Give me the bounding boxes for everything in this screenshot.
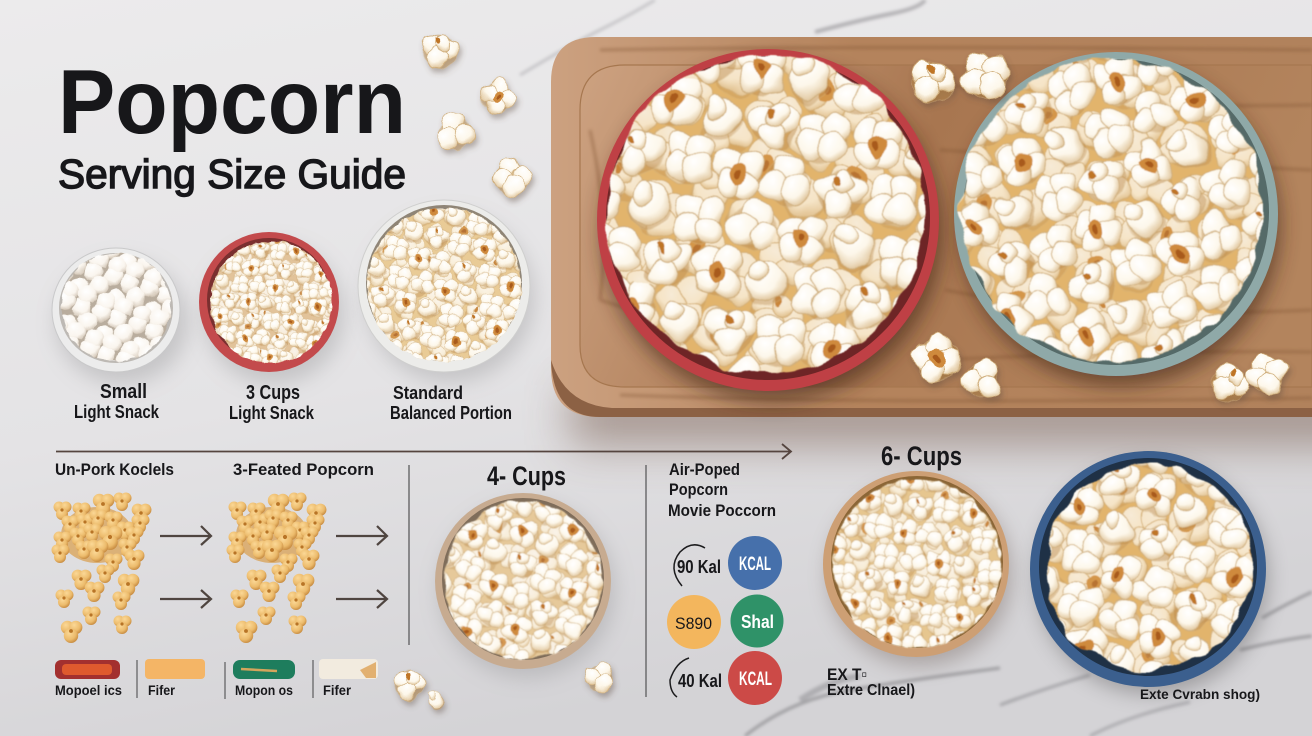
- legend bars: Mopoel ics: [55, 682, 122, 698]
- calorie badges: 40 Kal: [678, 671, 722, 691]
- title: [58, 52, 406, 197]
- bowl: dark blue: [1030, 451, 1268, 694]
- calorie badges: S890: [675, 614, 712, 633]
- heading: 4 cups: 4- Cups: [487, 461, 566, 491]
- bowl labels: Small: [100, 381, 147, 403]
- calorie badges: [667, 536, 784, 705]
- kernel cluster 2: [226, 492, 326, 643]
- legend bars: Mopon os: [235, 682, 293, 698]
- process arrows: [160, 526, 387, 608]
- captions: [827, 665, 1260, 702]
- legend bars: [55, 659, 378, 699]
- timeline arrow: [56, 444, 791, 459]
- bowl: large blue: [954, 52, 1280, 386]
- captions: EX T▫: [827, 665, 867, 684]
- wooden cutting board: [551, 37, 1312, 417]
- section headings: 3-Feated Popcorn: [233, 460, 374, 479]
- bowl: 6 cups: [823, 471, 1012, 666]
- bowl: standard white: [358, 200, 534, 382]
- legend bars: Fifer: [148, 682, 175, 698]
- popcorn type list: [668, 460, 776, 520]
- loose popcorn on board: [901, 48, 1291, 408]
- bowl labels: Light Snack: [74, 402, 160, 422]
- title: Popcorn: [58, 52, 406, 153]
- loose popcorn, top left: [416, 29, 536, 202]
- calorie badges: KCAL: [739, 554, 771, 575]
- calorie badges: Shal: [741, 612, 774, 632]
- bowl labels: Balanced Portion: [390, 403, 512, 423]
- heading: 6 cups: 6- Cups: [881, 441, 962, 471]
- calorie badges: 90 Kal: [677, 557, 721, 577]
- dividers: [409, 465, 646, 697]
- bowl: red 3 cups: [199, 232, 344, 384]
- popcorn type list: Popcorn: [669, 480, 728, 499]
- section headings: Un-Pork Koclels: [55, 460, 174, 479]
- kernel cluster 1: [52, 492, 151, 643]
- bowl: 4 cups: [435, 493, 615, 678]
- bowl: large red: [597, 49, 942, 402]
- captions: Exte Cvrabn shog): [1140, 686, 1260, 702]
- loose popcorn, bottom: [389, 656, 620, 707]
- legend bars: Fifer: [323, 682, 352, 698]
- bowl labels: Light Snack: [229, 403, 315, 423]
- bowl labels: 3 Cups: [246, 382, 300, 404]
- popcorn type list: Movie Poccorn: [668, 501, 776, 520]
- popcorn type list: Air-Poped: [669, 460, 740, 479]
- calorie badges: KCAL: [739, 669, 772, 690]
- bowl labels: Standard: [393, 383, 463, 403]
- bowl labels: [74, 381, 512, 423]
- subtitle: Serving Size Guide: [58, 151, 406, 197]
- cutting board shadow: [570, 385, 1312, 445]
- section headings: [55, 460, 374, 479]
- bowl: small white: [52, 248, 188, 384]
- captions: Extre Clnael): [827, 682, 915, 699]
